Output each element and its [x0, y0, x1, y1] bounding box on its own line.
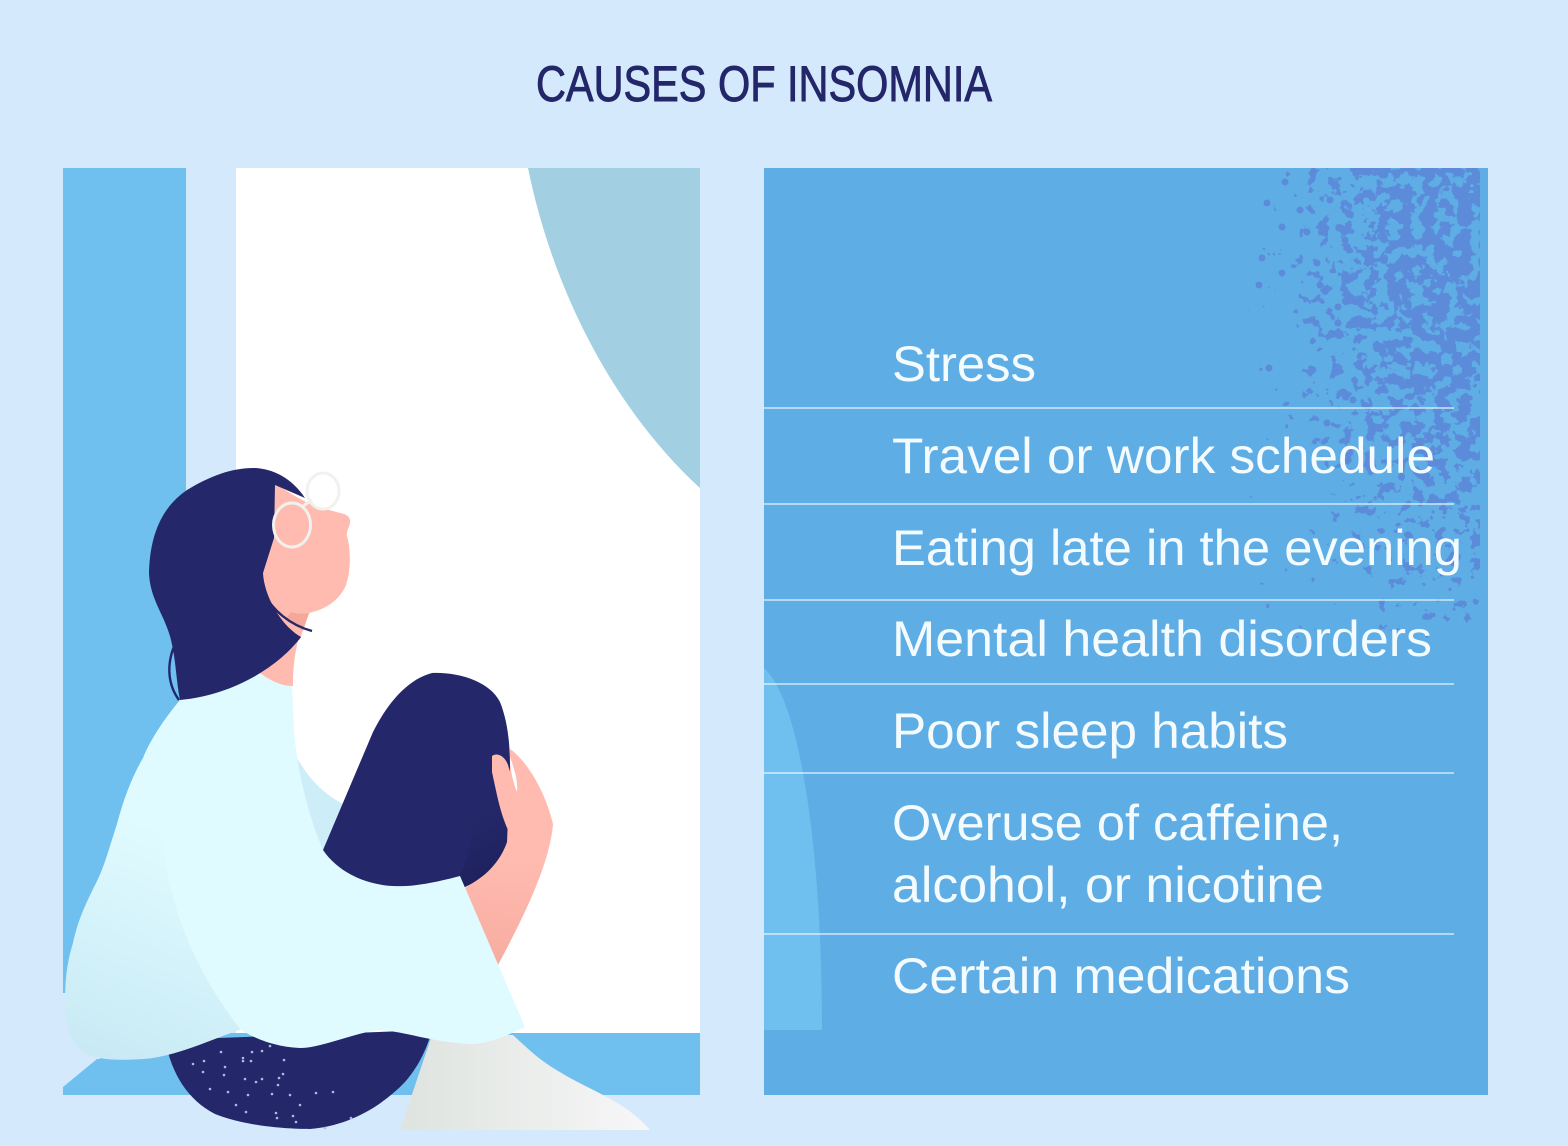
list text: Overuse of caffeine, — [892, 795, 1343, 851]
glasses — [274, 473, 339, 547]
speckle texture — [1240, 168, 1480, 638]
hair wisp — [264, 593, 312, 631]
list text: alcohol, or nicotine — [892, 857, 1324, 913]
knee — [323, 673, 510, 905]
face — [255, 480, 350, 640]
star dots — [193, 1046, 351, 1128]
list text: Travel or work schedule — [892, 428, 1435, 484]
light patch at sill — [63, 993, 100, 1087]
list text — [892, 336, 1462, 1004]
list text: Eating late in the evening — [892, 520, 1462, 576]
knee shadow — [460, 800, 508, 888]
shin and hand — [465, 749, 553, 965]
curtain — [528, 168, 700, 488]
hair — [149, 468, 305, 700]
neck shadow — [285, 612, 309, 631]
list text: Stress — [892, 336, 1036, 392]
divider lines — [764, 408, 1454, 934]
foot cloth — [400, 1035, 650, 1130]
finger gap — [510, 757, 517, 792]
list text: Certain medications — [892, 948, 1350, 1004]
neck — [250, 600, 310, 686]
illustration: woman sitting at window — [65, 468, 650, 1130]
title: CAUSES OF INSOMNIA — [536, 56, 993, 112]
panel: causes list — [764, 168, 1488, 1095]
window pane — [236, 168, 700, 1033]
thumb — [492, 754, 515, 830]
sweater arm — [162, 674, 525, 1048]
seat with stars — [165, 1030, 432, 1129]
speckle dots — [1259, 182, 1353, 423]
window frame strip — [186, 168, 236, 1033]
torso shadow — [290, 745, 345, 860]
hair strand — [169, 644, 179, 700]
panel background — [764, 168, 1488, 1095]
pale curtain shape — [764, 668, 822, 1030]
list text: Poor sleep habits — [892, 703, 1288, 759]
list text: Mental health disorders — [892, 611, 1432, 667]
window wall — [63, 168, 700, 1095]
panel: window illustration — [63, 168, 700, 1095]
sweater back — [65, 700, 300, 1060]
